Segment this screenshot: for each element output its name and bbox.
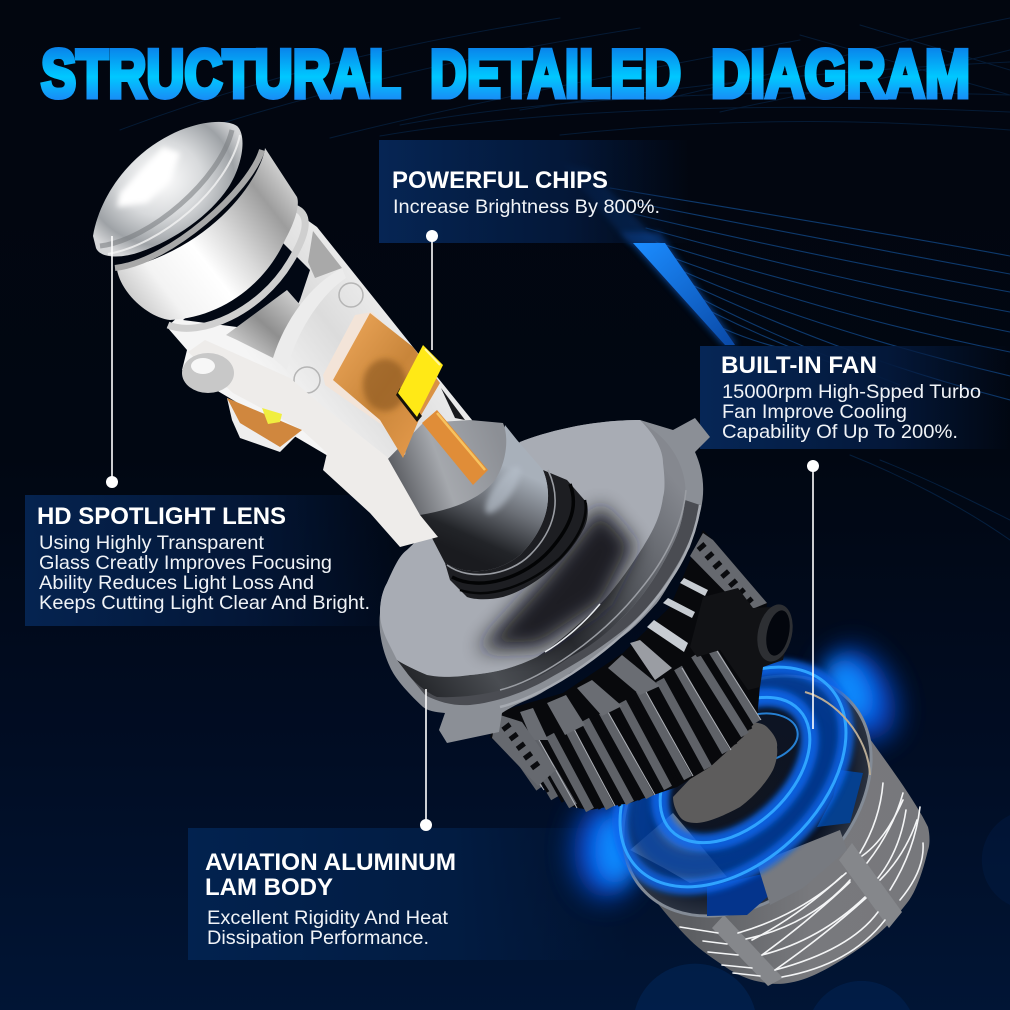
mottled fin edges (492, 533, 767, 786)
text: aviation aluminum lam body: LAM BODY (205, 874, 333, 901)
text: HD spotlight lens: Keeps Cutting Light Clear And Bright. (39, 592, 370, 614)
mounting disc flange (379, 418, 710, 743)
bright fin highlights (647, 578, 708, 652)
fan blade silver (630, 813, 727, 883)
title: STRUCTURAL (41, 36, 401, 112)
window between rings (183, 240, 310, 357)
panel: powerful chips (379, 140, 689, 243)
housing white line pattern (680, 783, 923, 977)
housing band right (839, 843, 902, 928)
fan rim tan highlight (805, 692, 870, 775)
bulb illustration (93, 122, 930, 986)
text: HD spotlight lens: Ability Reduces Light Loss And (39, 572, 314, 594)
arc strut (273, 268, 346, 370)
text: built-in fan: Fan Improve Cooling (722, 401, 907, 423)
panel: HD spotlight lens (25, 495, 395, 626)
inner light surface (380, 420, 664, 677)
text: built-in fan: 15000rpm High-Spped Turbo (722, 381, 981, 403)
fan cylinder housing (630, 725, 930, 986)
panel: built-in fan (700, 346, 1010, 449)
text: aviation aluminum lam body (205, 849, 456, 949)
fin strips (503, 643, 757, 810)
text: HD spotlight lens: Glass Creatly Improves Focusing (39, 552, 332, 574)
lower silver ring (168, 208, 305, 328)
inner silver reflector (226, 290, 302, 358)
lens holder rim (115, 150, 262, 268)
silver neck (420, 425, 548, 571)
disc outer body with tabs (379, 418, 710, 743)
tube rivets (294, 283, 363, 393)
outer dark band (407, 500, 700, 705)
middle dark band (397, 420, 686, 697)
text: powerful chips: POWERFUL CHIPS (392, 167, 608, 194)
text: built-in fan (721, 352, 981, 443)
blue rings (578, 624, 888, 930)
text: powerful chips: Increase Brightness By 800%. (393, 196, 660, 218)
lens dome (93, 122, 243, 257)
shadow on disc (478, 505, 635, 650)
fan blade gray right (757, 830, 847, 905)
text: built-in fan: BUILT-IN FAN (721, 352, 877, 379)
rim highlights (500, 490, 700, 707)
motor hub (673, 722, 777, 823)
pale substrate plate (323, 312, 420, 455)
lens holder band (117, 148, 298, 320)
fan face with blades and blue rings (575, 624, 919, 965)
leader line: fan (807, 460, 819, 729)
heat sink fins (490, 530, 767, 810)
white arm (188, 340, 438, 547)
text: aviation aluminum lam body: Excellent Rigidity And Heat (207, 907, 449, 929)
copper circuit board (333, 313, 488, 485)
fan glow left (574, 802, 638, 898)
background light waves (120, 18, 1010, 540)
fan blade blue (707, 873, 772, 916)
housing band left (712, 915, 783, 986)
leader line: lens (106, 236, 118, 488)
metal neck and O-ring (382, 420, 588, 599)
inner silver base (382, 420, 506, 515)
bright blue light wedge (560, 163, 738, 345)
title (41, 36, 970, 112)
text: HD spotlight lens (37, 503, 370, 614)
text: aviation aluminum lam body: AVIATION ALUMINUM (205, 849, 456, 876)
text: built-in fan: Capability Of Up To 200%. (722, 421, 958, 443)
power connector (690, 588, 798, 690)
upper fin blades (520, 640, 672, 740)
lower lamp sphere and bracket (182, 353, 302, 452)
LED chip (396, 345, 443, 422)
leader line: aluminum body (420, 689, 432, 831)
strut highlight (308, 231, 342, 278)
text: HD spotlight lens: Using Highly Transparent (39, 532, 265, 554)
title: DETAILED (430, 36, 681, 112)
text: powerful chips (392, 167, 660, 218)
fan glow right (811, 638, 909, 752)
panel: aviation aluminum (188, 828, 628, 960)
O-ring lines (447, 462, 586, 593)
upper housing tube (167, 210, 472, 513)
leader line: chips (426, 230, 438, 350)
dark gap beside tube (441, 388, 465, 420)
O-ring dark collar (445, 470, 588, 599)
text: aviation aluminum lam body: Dissipation Performance. (207, 927, 429, 949)
fan blade blue right (817, 770, 863, 827)
text: HD spotlight lens: HD SPOTLIGHT LENS (37, 503, 286, 530)
